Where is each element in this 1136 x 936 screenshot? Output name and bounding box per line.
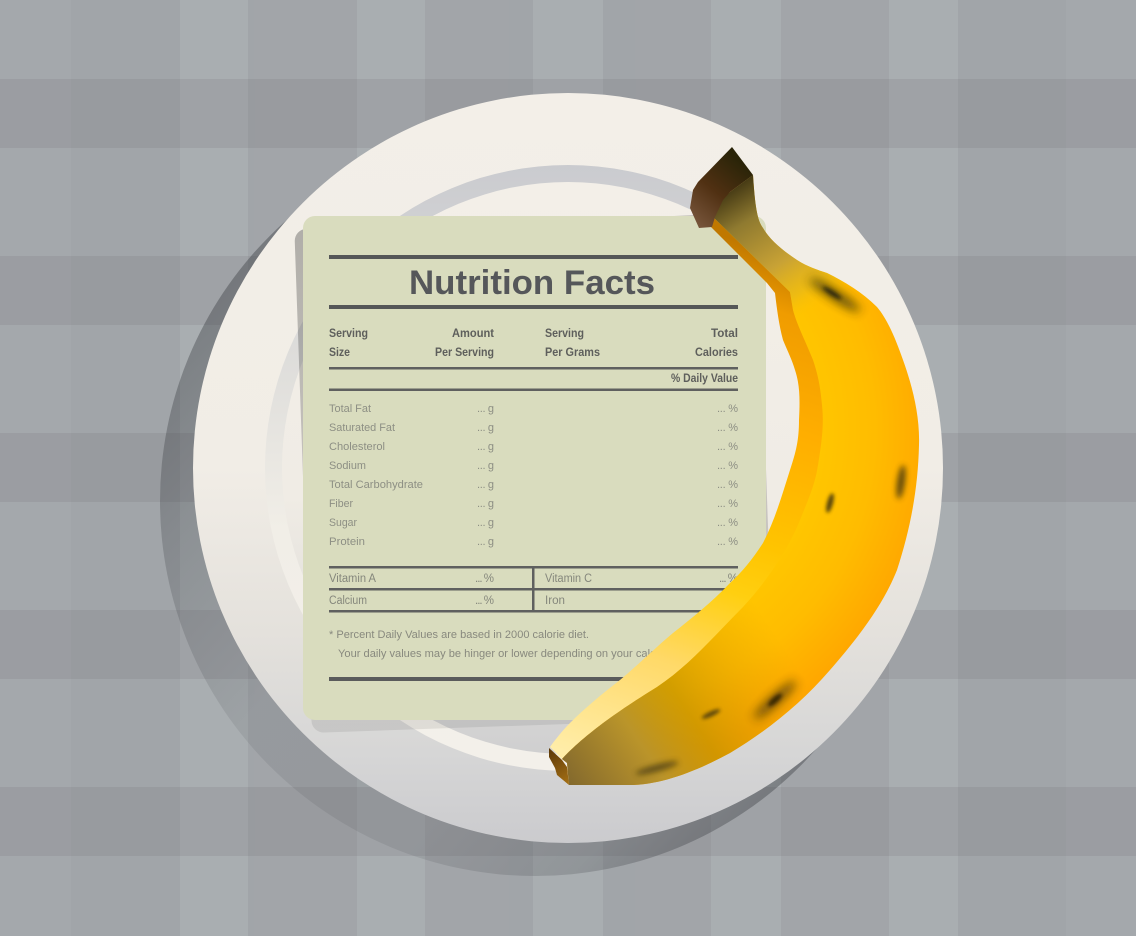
nutrient rows: ... %	[717, 517, 738, 529]
nutrient rows: ... %	[717, 460, 738, 472]
plate shadow	[160, 126, 910, 876]
nutrient rows: ... %	[717, 441, 738, 453]
nutrient rows: Sugar	[329, 517, 357, 529]
nutrient rows	[329, 403, 738, 548]
nutrient rows: Total Fat	[329, 403, 371, 415]
nutrient rows: ... g	[477, 441, 494, 453]
nutrient rows: Sodium	[329, 460, 366, 472]
column headers: Amount	[452, 328, 494, 340]
nutrient rows: Saturated Fat	[329, 422, 395, 434]
column headers: Size	[329, 347, 350, 359]
nutrient rows: ... %	[717, 403, 738, 415]
footnote: * Percent Daily Values are based in 2000 calorie diet.	[329, 629, 589, 641]
nutrient rows: ... g	[477, 517, 494, 529]
column headers: Calories	[695, 347, 738, 359]
title: Nutrition Facts	[409, 264, 655, 302]
nutrient rows: Protein	[329, 536, 365, 548]
nutrient rows: ... g	[477, 460, 494, 472]
column headers	[329, 328, 738, 391]
column headers: % Daily Value	[671, 373, 738, 385]
nutrient rows: ... %	[717, 536, 738, 548]
nutrient rows: ... g	[477, 403, 494, 415]
column headers: Serving	[329, 328, 368, 340]
vitamins table: Calcium	[329, 595, 367, 607]
nutrient rows: ... %	[717, 422, 738, 434]
vitamins table: ... %	[475, 573, 494, 585]
nutrient rows: ... %	[717, 498, 738, 510]
nutrient rows: ... %	[717, 479, 738, 491]
banana	[549, 147, 920, 785]
vitamins table: Iron	[545, 595, 565, 607]
banana stem cap	[690, 147, 753, 228]
vitamins table	[329, 566, 738, 612]
vitamins table: ... %	[475, 595, 494, 607]
banana main face	[562, 175, 920, 785]
footnote: Your daily values may be hinger or lower depending on your calorie needs.	[338, 648, 705, 660]
banana side facet	[550, 217, 842, 759]
column headers: Serving	[545, 328, 584, 340]
nutrient rows: ... g	[477, 536, 494, 548]
banana spots	[635, 274, 907, 777]
nutrition label shadow	[294, 213, 775, 733]
vitamins table: Vitamin C	[545, 573, 592, 585]
vitamins table: ... %	[719, 573, 738, 585]
nutrient rows: ... g	[477, 479, 494, 491]
nutrient rows: Cholesterol	[329, 441, 385, 453]
nutrient rows: Total Carbohydrate	[329, 479, 423, 491]
plate	[193, 93, 943, 843]
vitamins table: ... %	[719, 595, 738, 607]
title	[329, 255, 738, 309]
nutrient rows: ... g	[477, 498, 494, 510]
column headers: Per Serving	[435, 347, 494, 359]
column headers: Total	[711, 328, 738, 340]
nutrient rows: Fiber	[329, 498, 353, 510]
nutrition facts label	[303, 216, 766, 720]
column headers: Per Grams	[545, 347, 600, 359]
nutrient rows: ... g	[477, 422, 494, 434]
footnote	[329, 629, 738, 681]
vitamins table: Vitamin A	[329, 573, 376, 585]
banana tip	[549, 748, 569, 785]
